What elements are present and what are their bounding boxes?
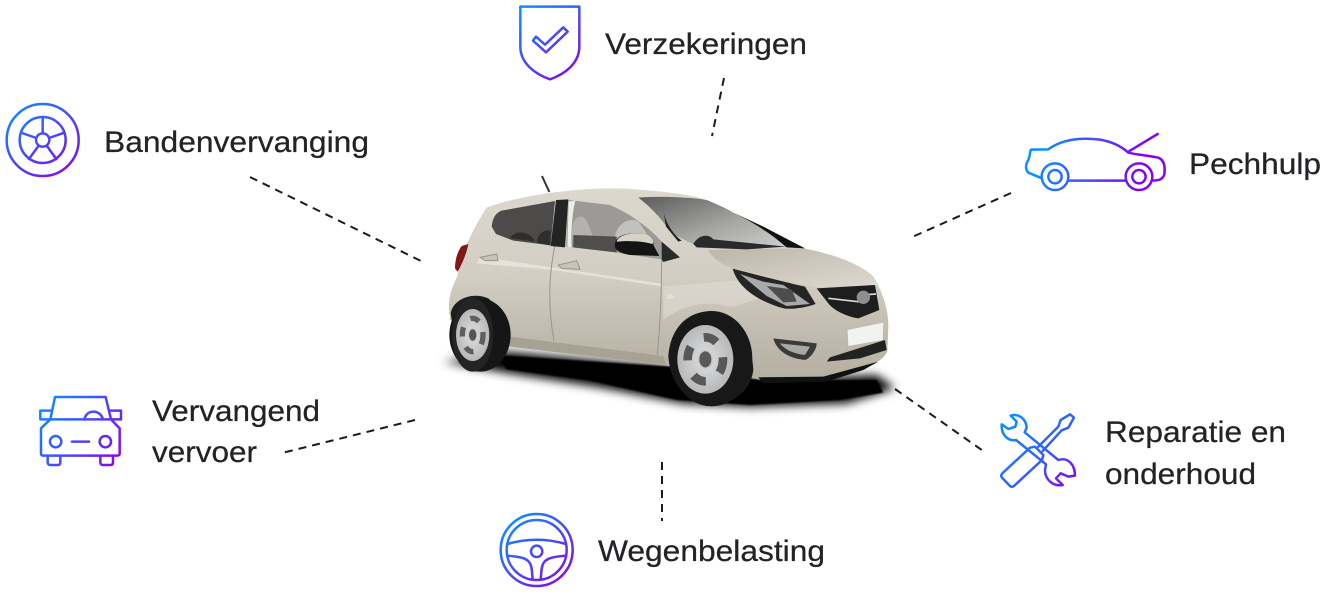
item: Pechhulp	[1026, 134, 1321, 190]
tail light	[455, 244, 468, 272]
connector: Reparatie en onderhoud	[895, 389, 986, 453]
fog light	[773, 338, 817, 360]
icon: tyre wheel	[7, 104, 79, 176]
lower body highlight	[663, 280, 763, 320]
item: Bandenvervanging	[7, 104, 369, 176]
connector: Pechhulp	[910, 193, 1011, 238]
car body	[449, 188, 888, 379]
icon: car front view	[40, 397, 121, 465]
antenna	[542, 176, 549, 192]
item: Reparatie en onderhoud	[1001, 414, 1294, 491]
connector: Vervangend vervoer	[282, 420, 415, 453]
item: Verzekeringen	[520, 7, 807, 79]
grille	[817, 285, 879, 318]
label: Pechhulp	[1189, 148, 1321, 181]
windshield	[638, 197, 787, 249]
connector: Verzekeringen	[712, 78, 724, 136]
label: onderhoud	[1105, 458, 1256, 491]
door seams and handles	[480, 245, 662, 355]
connector: Wegenbelasting	[661, 462, 663, 521]
car shadow	[443, 352, 895, 407]
badge	[857, 291, 870, 304]
icon: steering wheel	[501, 514, 573, 586]
rear window	[492, 201, 555, 245]
icon: wrench and screwdriver	[1001, 414, 1075, 487]
headlight	[733, 269, 816, 309]
hood	[708, 248, 878, 287]
icon: shield with checkmark	[520, 7, 579, 79]
car photo illustration	[443, 176, 895, 407]
label: Wegenbelasting	[598, 535, 825, 568]
front wheel	[668, 311, 753, 406]
label: Bandenvervanging	[104, 126, 369, 159]
number plate	[848, 323, 883, 346]
A pillar	[662, 242, 680, 262]
item: Vervangend vervoer	[40, 395, 328, 469]
pillar	[551, 199, 568, 247]
icon: car with open bonnet	[1026, 134, 1165, 190]
label: Verzekeringen	[605, 28, 807, 61]
connector: Bandenvervanging	[250, 177, 423, 262]
rear wheel	[449, 296, 511, 372]
label: Vervangend	[152, 395, 320, 428]
item: Wegenbelasting	[501, 514, 825, 586]
fuel flap	[666, 294, 674, 299]
front door window	[566, 200, 662, 259]
lower grille	[827, 340, 887, 362]
label: vervoer	[152, 436, 257, 469]
side mirror	[615, 233, 659, 256]
label: Reparatie en	[1105, 416, 1286, 449]
